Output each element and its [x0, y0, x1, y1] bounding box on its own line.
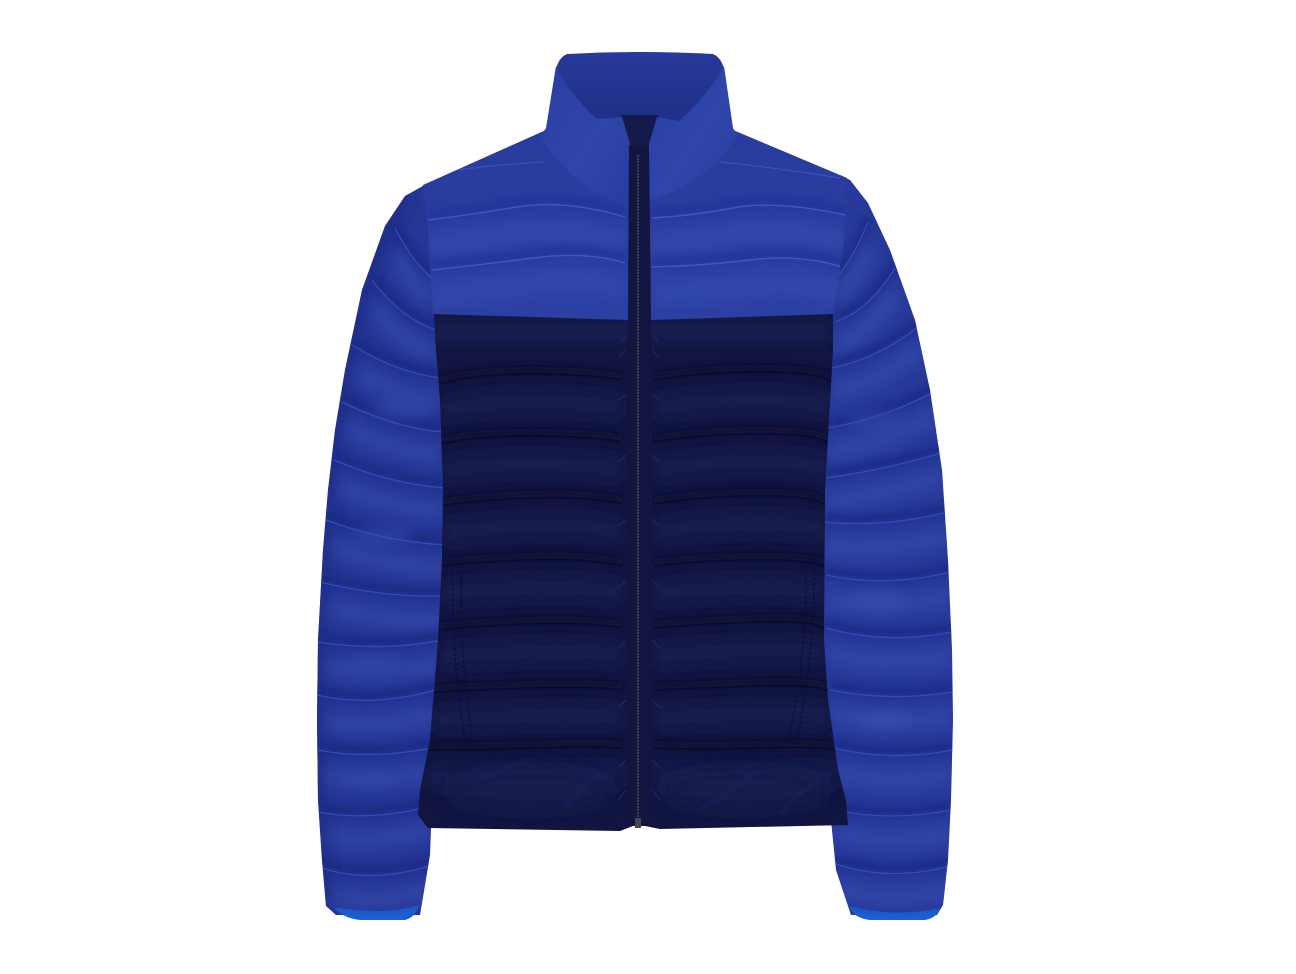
- right sleeve: [824, 175, 953, 915]
- collar left flap: [540, 66, 631, 207]
- left cuff: [334, 905, 419, 920]
- zipper pull: [635, 818, 641, 828]
- gathered placket folds: [618, 335, 660, 800]
- navy neck label strip: [621, 115, 659, 155]
- right cuff: [849, 906, 940, 920]
- collar right flap: [648, 66, 738, 200]
- right pocket seam: [788, 552, 814, 745]
- illustration: two-tone quilted puffer jacket: [317, 52, 953, 920]
- royal blue shoulder yoke: [415, 125, 855, 325]
- navy body panel: [410, 310, 855, 840]
- navy zip placket: [626, 145, 652, 826]
- left pocket seam: [453, 558, 473, 745]
- zipper: [637, 155, 639, 826]
- left sleeve: [317, 182, 443, 915]
- collar inner lining: [556, 52, 724, 128]
